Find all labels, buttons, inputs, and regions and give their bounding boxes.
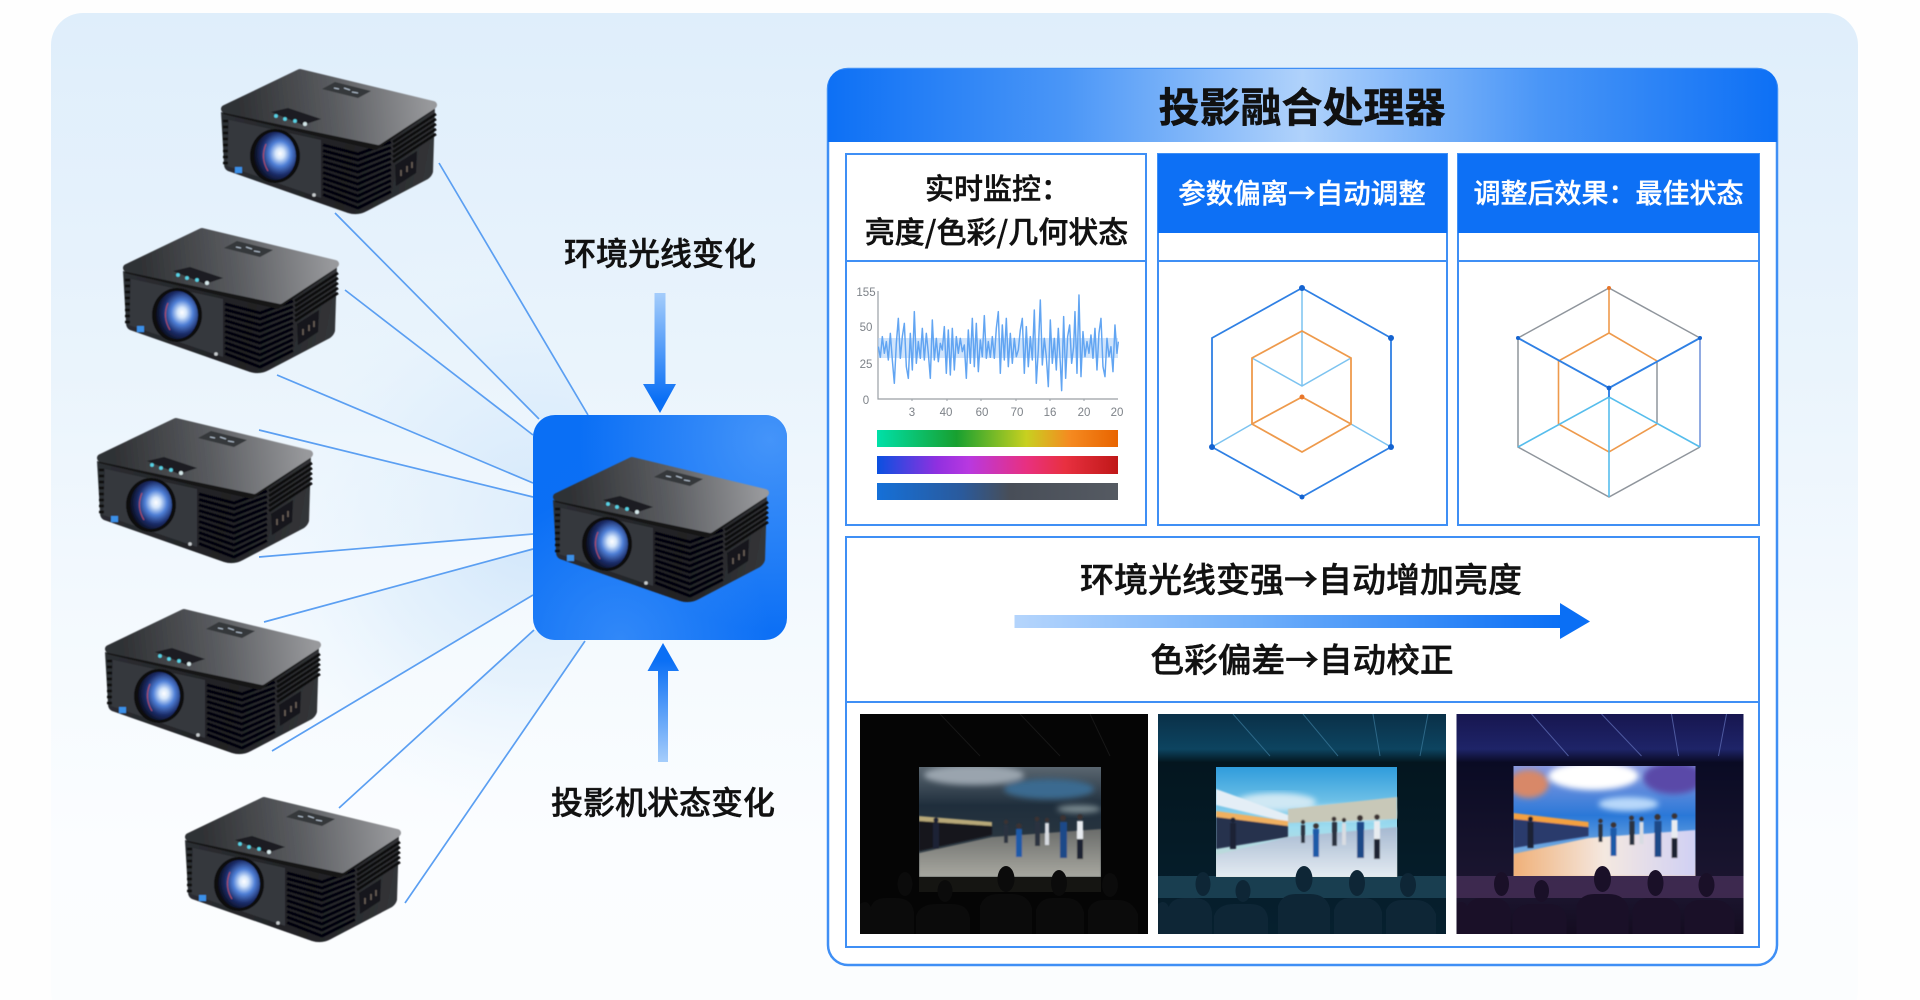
line chart: 155 — [856, 287, 876, 299]
centre projector block — [533, 415, 787, 640]
card heading: 实时监控： — [925, 166, 1070, 208]
line chart: 20 — [1078, 407, 1090, 419]
photo: before adjustment, dim — [860, 714, 1148, 934]
line chart: 70 — [1011, 407, 1023, 419]
hexagon diagram: adjusted — [1516, 286, 1702, 497]
line chart: 40 — [940, 407, 952, 419]
colour bar: geometry — [877, 483, 1118, 500]
icon: projector 1 — [221, 73, 436, 214]
icon: projector 4 — [105, 613, 320, 754]
line chart: 50 — [860, 322, 872, 334]
panel: projection blending processor — [828, 69, 1777, 965]
label: ambient light change: 环境光线变化 — [564, 229, 756, 275]
arrow: rule flow — [1014, 603, 1590, 639]
card: adjusted result — [1458, 154, 1759, 525]
line chart: 60 — [976, 407, 988, 419]
label: projector state change: 投影机状态变化 — [551, 778, 775, 824]
photo: optimal state — [1456, 714, 1744, 934]
line chart: 20 — [1111, 407, 1123, 419]
icon: projector 5 — [185, 801, 400, 942]
photo: adjusted brightness — [1158, 714, 1446, 934]
icon: projector 2 — [123, 232, 338, 373]
rule: colour: 色彩偏差→自动校正 — [1150, 633, 1454, 682]
line chart — [856, 287, 1123, 419]
rule: brightness: 环境光线变强→自动增加亮度 — [1080, 553, 1522, 602]
card: deviation auto adjust — [1158, 154, 1447, 525]
card heading: 调整后效果：最佳状态 — [1474, 172, 1744, 211]
icon: projector 3 — [97, 422, 312, 563]
colour bar: colour — [877, 456, 1118, 474]
line chart: 25 — [860, 359, 872, 371]
connection beams between projectors and centre unit — [259, 163, 588, 903]
colour bar: brightness — [877, 430, 1118, 447]
card: real-time monitoring — [846, 154, 1146, 525]
line chart: 3 — [909, 407, 915, 419]
title: 投影融合处理器 — [1158, 74, 1446, 134]
hexagon diagram: deviated — [1209, 285, 1394, 500]
arrow: up into centre block — [648, 643, 679, 762]
card subheading: 亮度/色彩/几何状态 — [865, 208, 1128, 252]
line chart: 16 — [1044, 407, 1056, 419]
line chart: 0 — [863, 395, 869, 407]
arrow: down into centre block — [643, 293, 676, 413]
card heading: 参数偏离→自动调整 — [1178, 171, 1426, 211]
card: adjustment rules and results — [846, 537, 1759, 947]
panel header — [828, 69, 1777, 142]
